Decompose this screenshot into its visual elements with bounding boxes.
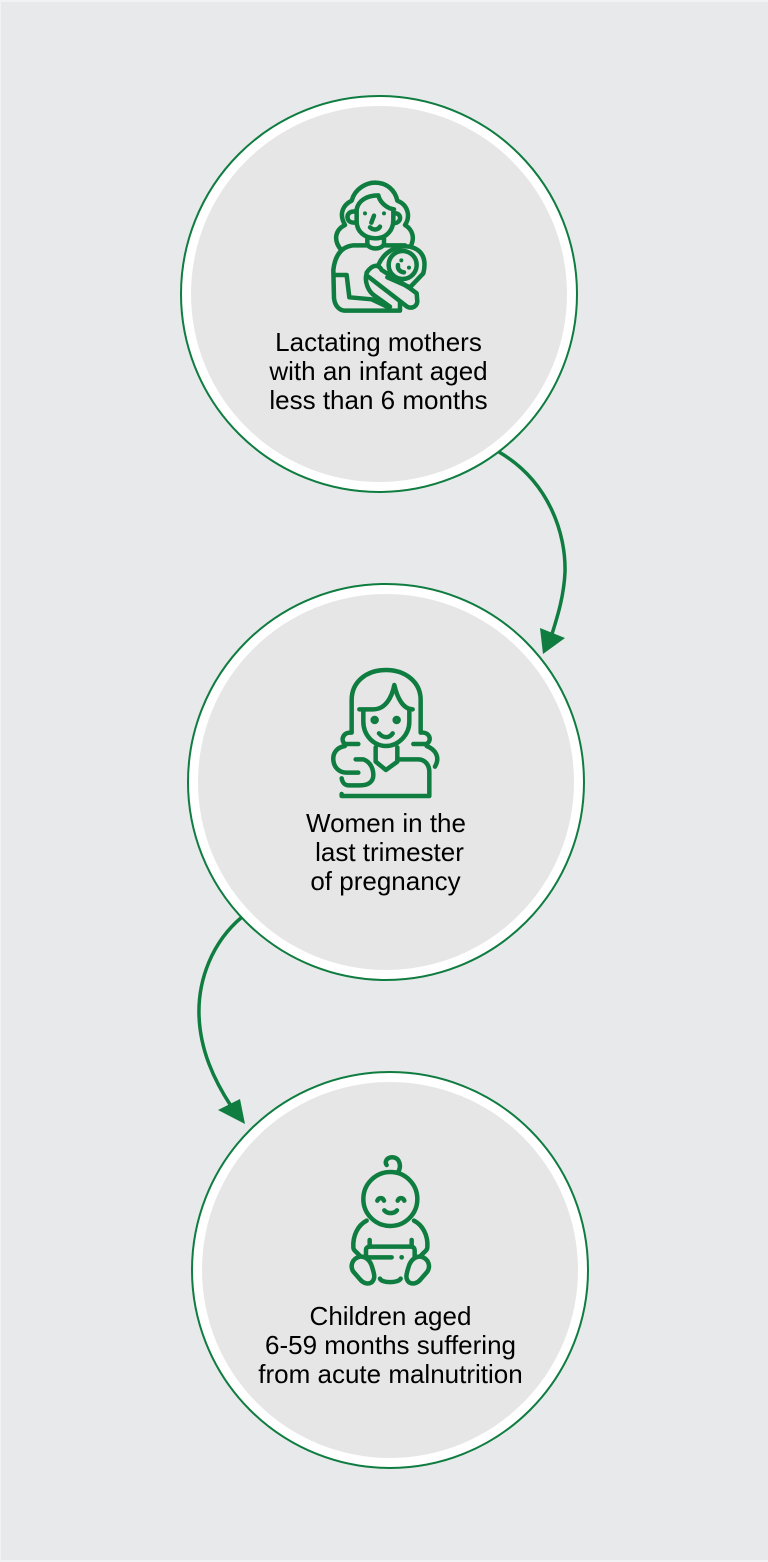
arrow: second circle to third circle <box>199 917 245 1124</box>
text: lactating mothers: with an infant aged <box>268 356 488 386</box>
text: children with acute malnutrition: from acute malnutrition <box>258 1359 523 1389</box>
icon: pregnant woman <box>333 670 437 796</box>
text: women in last trimester: Women in the <box>306 808 466 838</box>
text: women in last trimester: of pregnancy <box>310 866 461 896</box>
icon: mother holding infant <box>333 183 425 311</box>
text: lactating mothers: Lactating mothers <box>275 327 482 357</box>
text: children with acute malnutrition: 6-59 months suffering <box>265 1330 516 1360</box>
arrow: first circle to second circle <box>499 452 565 654</box>
text: lactating mothers: less than 6 months <box>269 385 488 415</box>
panel: children <box>192 1072 588 1468</box>
text: children with acute malnutrition <box>258 1301 523 1389</box>
panel: lactating mothers <box>181 96 577 492</box>
text: lactating mothers <box>268 327 488 415</box>
text: children with acute malnutrition: Children aged <box>310 1301 471 1331</box>
text: women in last trimester: last trimester <box>315 837 464 867</box>
icon: baby <box>352 1157 429 1283</box>
text: women in last trimester <box>306 808 466 896</box>
panel: pregnant women <box>188 584 584 980</box>
